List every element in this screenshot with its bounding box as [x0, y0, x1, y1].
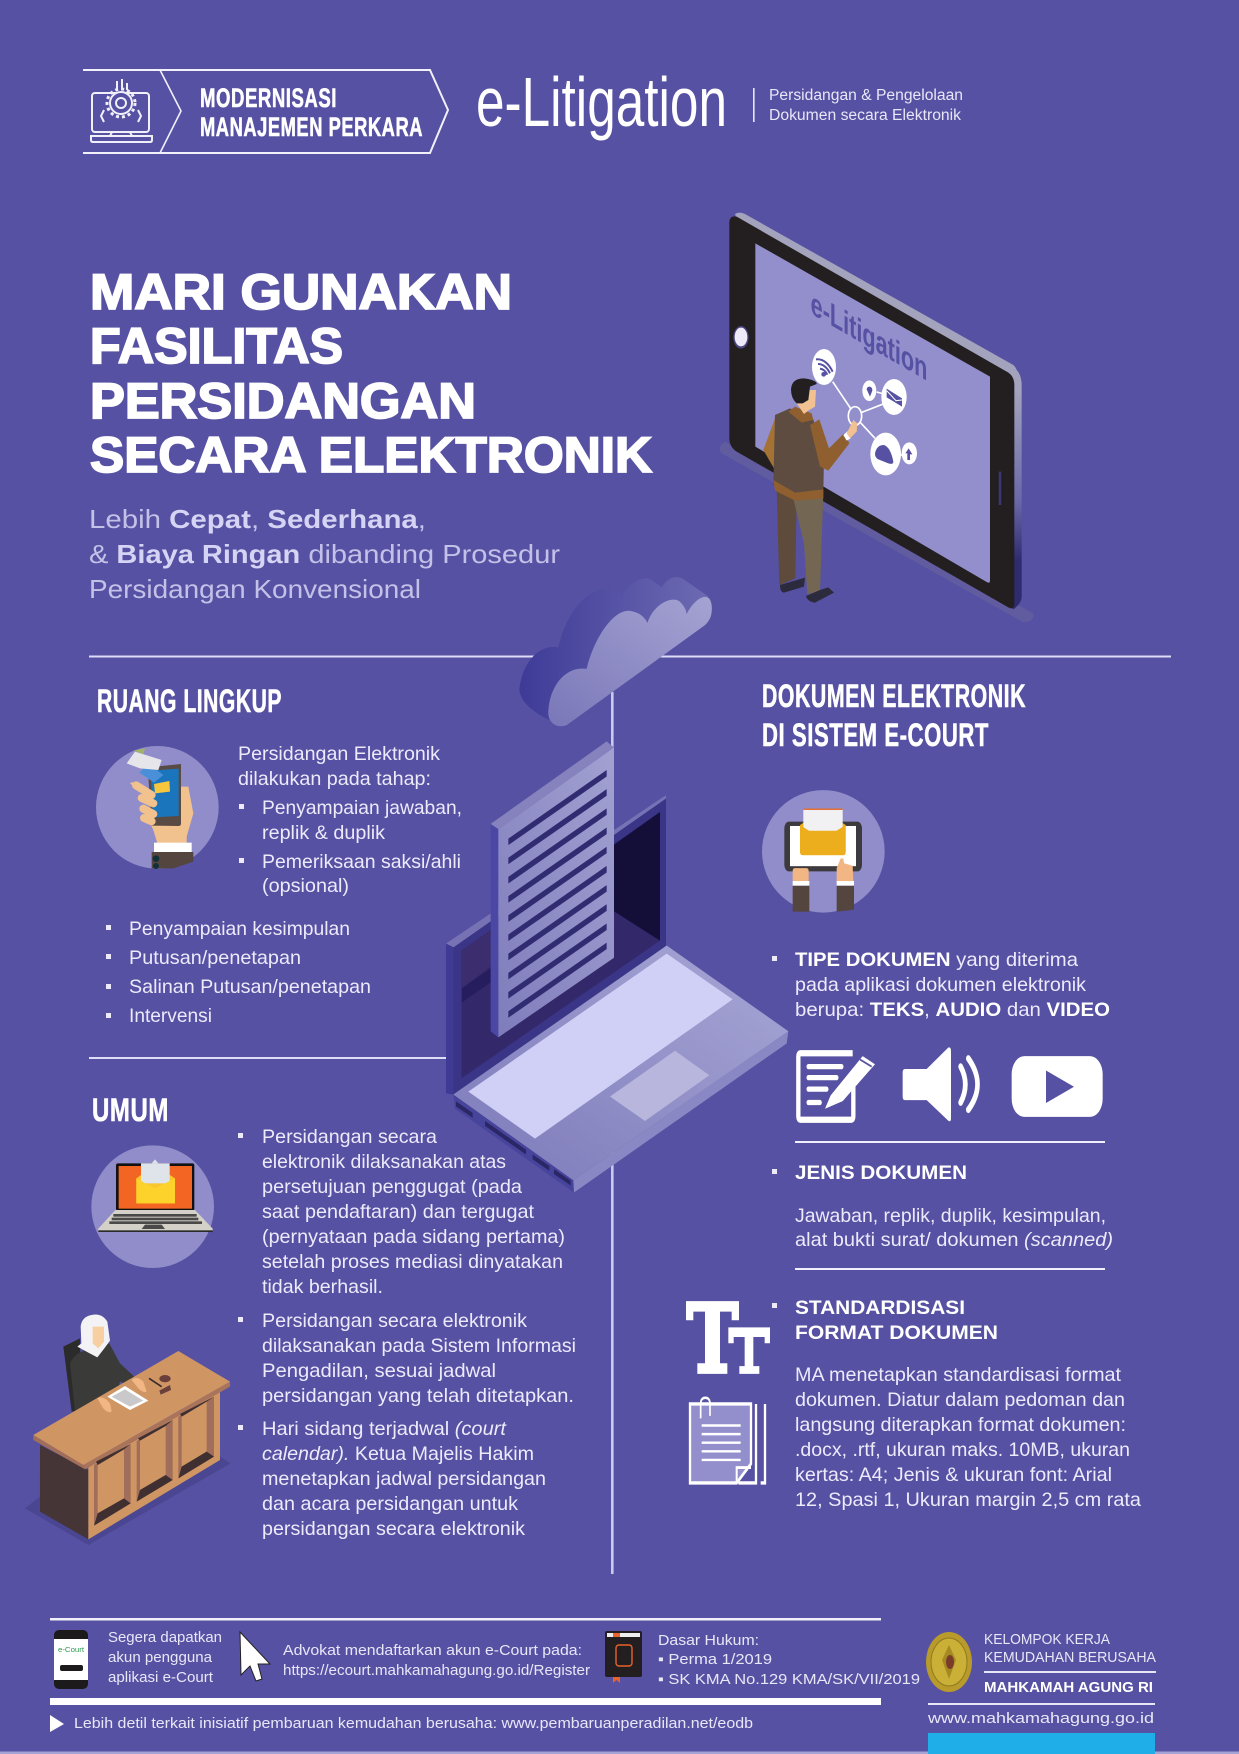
- header subtitle: Persidangan & Pengelolaan: [769, 87, 963, 104]
- laptop base: [453, 1094, 574, 1192]
- heading: umum: UMUM: [92, 1092, 169, 1128]
- horizontal divider top: [89, 656, 1171, 658]
- panel: ruang lingkup: [96, 683, 462, 1027]
- text: umum paragraphs: dan acara persidangan untuk: [262, 1493, 518, 1515]
- text: dasar hukum: Dasar Hukum:: [658, 1632, 759, 1649]
- bullet list: Penyampaian jawaban,: [262, 797, 462, 819]
- icons: text audio video: [798, 1047, 1103, 1121]
- text: segera dapatkan: [108, 1629, 222, 1686]
- text: umum paragraphs: Pengadilan, sesuai jadwal: [262, 1360, 496, 1382]
- text: standardisasi: kertas: A4; Jenis & ukuran font: Arial: [795, 1464, 1112, 1486]
- tablet title: e-Litigation: [811, 285, 927, 388]
- header subtitle: [753, 87, 963, 124]
- text: umum paragraphs: persidangan yang telah ditetapkan.: [262, 1385, 574, 1407]
- text: standardisasi: MA menetapkan standardisasi format: [795, 1364, 1122, 1386]
- panel: dokumen elektronik: [686, 678, 1141, 1511]
- heading: e-Litigation: e-Litigation: [476, 63, 727, 141]
- text: dasar hukum: ▪ SK KMA No.129 KMA/SK/VII/2019: [658, 1671, 920, 1688]
- text: umum paragraphs: [238, 1126, 576, 1540]
- blue tab: [928, 1733, 1155, 1754]
- bullet list: [106, 797, 462, 1027]
- text: umum paragraphs: saat pendaftaran) dan tergugat: [262, 1201, 535, 1223]
- document page: [491, 741, 614, 1037]
- emblem: mahkamah agung: [926, 1632, 972, 1692]
- icon: speaker: [903, 1047, 977, 1121]
- text: umum paragraphs: (pernyataan pada sidang pertama): [262, 1226, 565, 1248]
- text: umum paragraphs: calendar). Ketua Majelis Hakim: [262, 1443, 534, 1465]
- icon: font size: [686, 1301, 770, 1374]
- heading: dokumen elektronik: [762, 678, 1026, 753]
- text: jenis dokumen: JENIS DOKUMEN: [795, 1162, 967, 1184]
- panel: umum: [91, 1092, 576, 1540]
- illustration: laptop with document: [446, 741, 788, 1192]
- text: umum paragraphs: elektronik dilaksanakan atas: [262, 1151, 506, 1173]
- heading: dokumen elektronik: DI SISTEM E-COURT: [762, 717, 989, 753]
- vertical divider: [611, 692, 614, 1574]
- icon: cursor: [240, 1632, 270, 1681]
- text: advokat: https://ecourt.mahkamahagung.go.id/Register: [283, 1662, 590, 1679]
- icon: computer with gear: [91, 79, 152, 142]
- network icons: [812, 349, 917, 475]
- laptop lid: [446, 795, 666, 1094]
- text: intro line 2: dilakukan pada tahap:: [238, 768, 431, 790]
- bullet list: Pemeriksaan saksi/ahli: [262, 851, 461, 873]
- bottom strip: [0, 1752, 1239, 1754]
- text: standardisasi: STANDARDISASI: [795, 1297, 965, 1319]
- text: kelompok kerja: MAHKAMAH AGUNG RI: [984, 1679, 1153, 1696]
- text: jenis dokumen: alat bukti surat/ dokumen (scanned): [795, 1229, 1113, 1251]
- icon: phone app: e-Court: [58, 1647, 84, 1654]
- main title: MARI GUNAKAN: [90, 264, 512, 320]
- text: standardisasi: .docx, .rtf, ukuran maks. 10MB, ukuran: [795, 1439, 1130, 1461]
- icon: tablet with envelope in hands: [762, 790, 885, 913]
- text: kelompok kerja: [927, 1631, 1156, 1727]
- header banner: [83, 70, 448, 153]
- icon: phone app: [54, 1630, 88, 1689]
- illustration: cloud: [519, 577, 712, 726]
- text: umum paragraphs: persidangan secara elektronik: [262, 1518, 525, 1540]
- text: standardisasi: langsung diterapkan format dokumen:: [795, 1414, 1126, 1436]
- header banner: MANAJEMEN PERKARA: [200, 112, 423, 142]
- main title: SECARA ELEKTRONIK: [90, 427, 652, 483]
- icon: clipped documents: [690, 1398, 765, 1483]
- icon: video play: [1012, 1056, 1103, 1117]
- text: tipe dokumen: berupa: TEKS, AUDIO dan VIDEO: [795, 999, 1110, 1021]
- text: umum paragraphs: persetujuan penggugat (pada: [262, 1176, 522, 1198]
- bullet list: (opsional): [262, 875, 349, 897]
- text: kelompok kerja: www.mahkamahagung.go.id: [927, 1710, 1154, 1727]
- tablet side buttons: [999, 472, 1001, 505]
- text: standardisasi: [772, 1297, 1141, 1511]
- text: umum paragraphs: Persidangan secara: [262, 1126, 437, 1148]
- bullet list: Intervensi: [129, 1005, 212, 1027]
- heading: dokumen elektronik: DOKUMEN ELEKTRONIK: [762, 678, 1026, 714]
- text: kelompok kerja: KEMUDAHAN BERUSAHA: [984, 1649, 1156, 1666]
- text: advokat: [283, 1642, 590, 1679]
- text: umum paragraphs: Persidangan secara elektronik: [262, 1310, 527, 1332]
- footer link line: Lebih detil terkait inisiatif pembaruan kemudahan berusaha: www.pembaruanperadilan.net/eodb: [74, 1715, 753, 1732]
- subtitle: & Biaya Ringan dibanding Prosedur: [89, 539, 560, 569]
- text: standardisasi: 12, Spasi 1, Ukuran margin 2,5 cm rata: [795, 1489, 1141, 1511]
- bullet list: Putusan/penetapan: [129, 947, 301, 969]
- text: umum paragraphs: setelah proses mediasi dinyatakan: [262, 1251, 563, 1273]
- text: kelompok kerja: KELOMPOK KERJA: [984, 1631, 1110, 1648]
- text: tipe dokumen: pada aplikasi dokumen elektronik: [795, 974, 1086, 996]
- bullet list: replik & duplik: [262, 822, 385, 844]
- bullet list: Salinan Putusan/penetapan: [129, 976, 371, 998]
- text: standardisasi: FORMAT DOKUMEN: [795, 1322, 998, 1344]
- main title: PERSIDANGAN: [90, 373, 476, 429]
- icon: document and pen: [798, 1053, 875, 1120]
- text: dasar hukum: [658, 1632, 920, 1688]
- icon: laptop with envelope: [91, 1145, 214, 1268]
- header subtitle: Dokumen secara Elektronik: [769, 107, 961, 124]
- text: umum paragraphs: Hari sidang terjadwal (court: [262, 1418, 508, 1440]
- heading: ruang lingkup: RUANG LINGKUP: [97, 683, 282, 719]
- text: segera dapatkan: Segera dapatkan: [108, 1629, 222, 1646]
- text: segera dapatkan: aplikasi e-Court: [108, 1669, 214, 1686]
- text: dasar hukum: ▪ Perma 1/2019: [658, 1651, 772, 1668]
- laptop touchpad: [610, 1051, 709, 1121]
- main title: FASILITAS: [90, 318, 343, 374]
- illustration: judge at desk: [25, 1315, 231, 1545]
- horizontal divider left: [89, 1057, 450, 1059]
- subtitle: Lebih Cepat , Sederhana ,: [89, 504, 426, 534]
- banner text: MODERNISASI: [200, 83, 337, 113]
- text: umum paragraphs: dilaksanakan pada Sistem Informasi: [262, 1335, 576, 1357]
- text: intro: Persidangan Elektronik: [238, 743, 440, 765]
- person figure: [763, 378, 857, 603]
- text: advokat: Advokat mendaftarkan akun e-Court pada:: [283, 1642, 582, 1659]
- icon: hand holding phone: [96, 746, 219, 869]
- text: jenis dokumen: [772, 1162, 1113, 1251]
- subtitle: [89, 504, 560, 604]
- text: umum paragraphs: menetapkan jadwal persidangan: [262, 1468, 546, 1490]
- text: tipe dokumen: [772, 949, 1110, 1021]
- icon: law book: [605, 1631, 642, 1683]
- bullet list: Penyampaian kesimpulan: [129, 918, 350, 940]
- footer: [0, 1618, 1239, 1754]
- text: umum paragraphs: tidak berhasil.: [262, 1276, 383, 1298]
- tablet home button: [733, 326, 749, 349]
- illustration: person at tablet: [720, 213, 1034, 622]
- main title: [90, 264, 652, 483]
- text: segera dapatkan: akun pengguna: [108, 1649, 213, 1666]
- network connections: [833, 382, 904, 457]
- laptop keyboard: [468, 954, 733, 1139]
- text: tipe dokumen: TIPE DOKUMEN yang diterima: [795, 949, 1078, 971]
- subtitle: Persidangan Konvensional: [89, 574, 421, 604]
- text: jenis dokumen: Jawaban, replik, duplik, kesimpulan,: [795, 1205, 1106, 1227]
- text: standardisasi: dokumen. Diatur dalam pedoman dan: [795, 1389, 1125, 1411]
- laptop ports: [456, 1101, 571, 1186]
